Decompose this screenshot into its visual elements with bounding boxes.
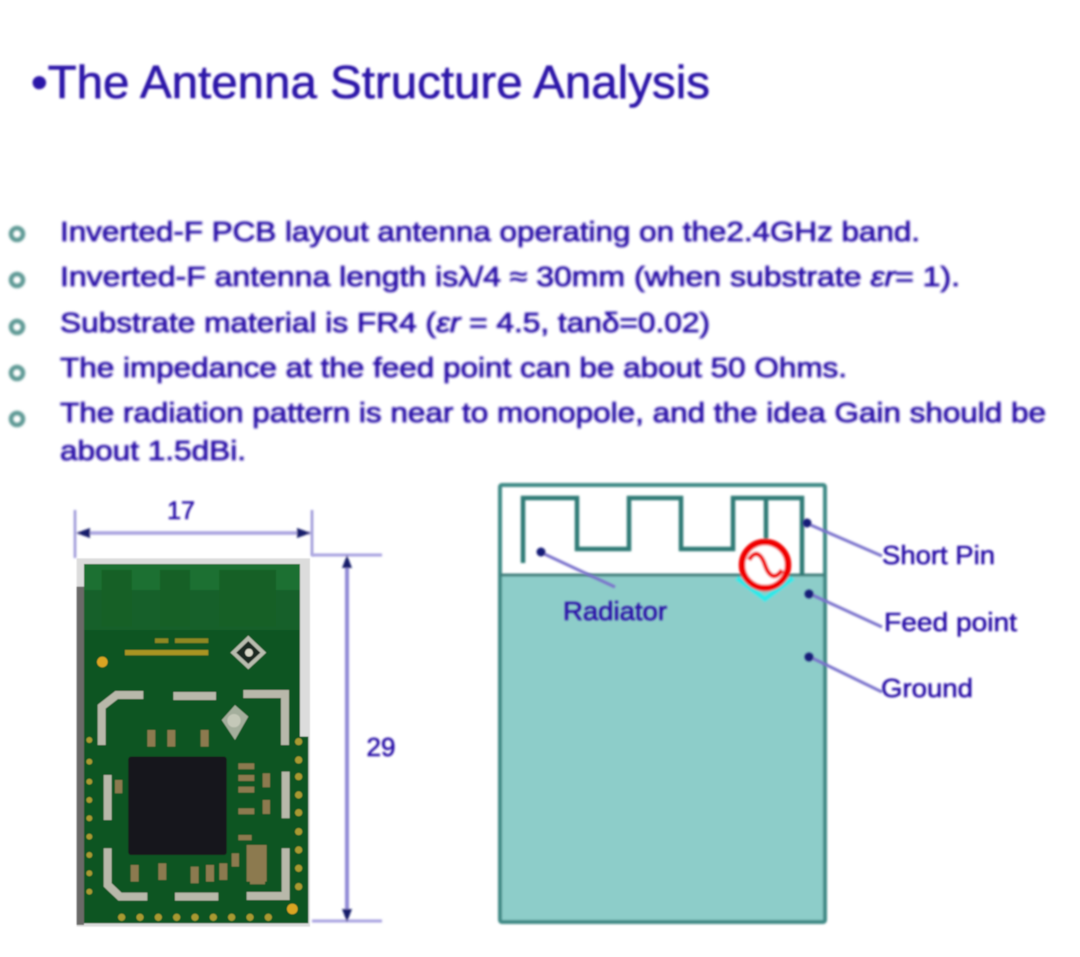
bullet 2: Inverted-F antenna length isλ/4 ≈ 30mm (when substrate εr= 1). bbox=[60, 261, 960, 292]
label: ground bbox=[804, 652, 973, 703]
dimension: height 29 bbox=[312, 555, 395, 922]
label: ground: Ground bbox=[881, 673, 973, 703]
bullet 4: The impedance at the feed point can be about 50 Ohms. bbox=[60, 352, 847, 383]
title: •The Antenna Structure Analysis bbox=[31, 56, 710, 108]
label: feed point bbox=[804, 590, 1018, 637]
feed highlight bbox=[737, 578, 793, 599]
bullet 1: Inverted-F PCB layout antenna operating on the2.4GHz band. bbox=[60, 216, 920, 247]
photo: PCB module bbox=[77, 558, 310, 927]
bullet list bbox=[11, 216, 1046, 466]
label: short pin: Short Pin bbox=[882, 540, 995, 570]
icon: signal source bbox=[742, 542, 788, 588]
small components bbox=[115, 730, 270, 884]
bullet 3: Substrate material is FR4 ( εr = 4.5, tanδ=0.02) bbox=[60, 307, 710, 338]
dimension: width 17: 17 bbox=[167, 497, 195, 525]
label: short pin bbox=[802, 518, 995, 570]
bullet 5 bbox=[11, 397, 1046, 466]
chip bbox=[128, 757, 227, 855]
board outline bbox=[500, 485, 825, 922]
label: feed point: Feed point bbox=[884, 607, 1018, 637]
dimension: height 29: 29 bbox=[367, 732, 395, 762]
silver traces bbox=[102, 694, 286, 897]
edge pads bbox=[86, 737, 302, 921]
bullet 5: The radiation pattern is near to monopole, and the idea Gain should be bbox=[60, 397, 1046, 428]
bullet 5: about 1.5dBi. bbox=[60, 435, 246, 466]
ground plane bbox=[500, 576, 825, 922]
antenna structure diagram bbox=[500, 485, 825, 922]
label: radiator bbox=[536, 548, 667, 626]
dimension: width 17 bbox=[75, 497, 312, 558]
short pin bbox=[764, 498, 768, 545]
connector pads bbox=[233, 638, 263, 667]
gold marking bbox=[125, 650, 208, 655]
meander radiator bbox=[523, 498, 802, 575]
label: radiator: Radiator bbox=[563, 596, 667, 626]
